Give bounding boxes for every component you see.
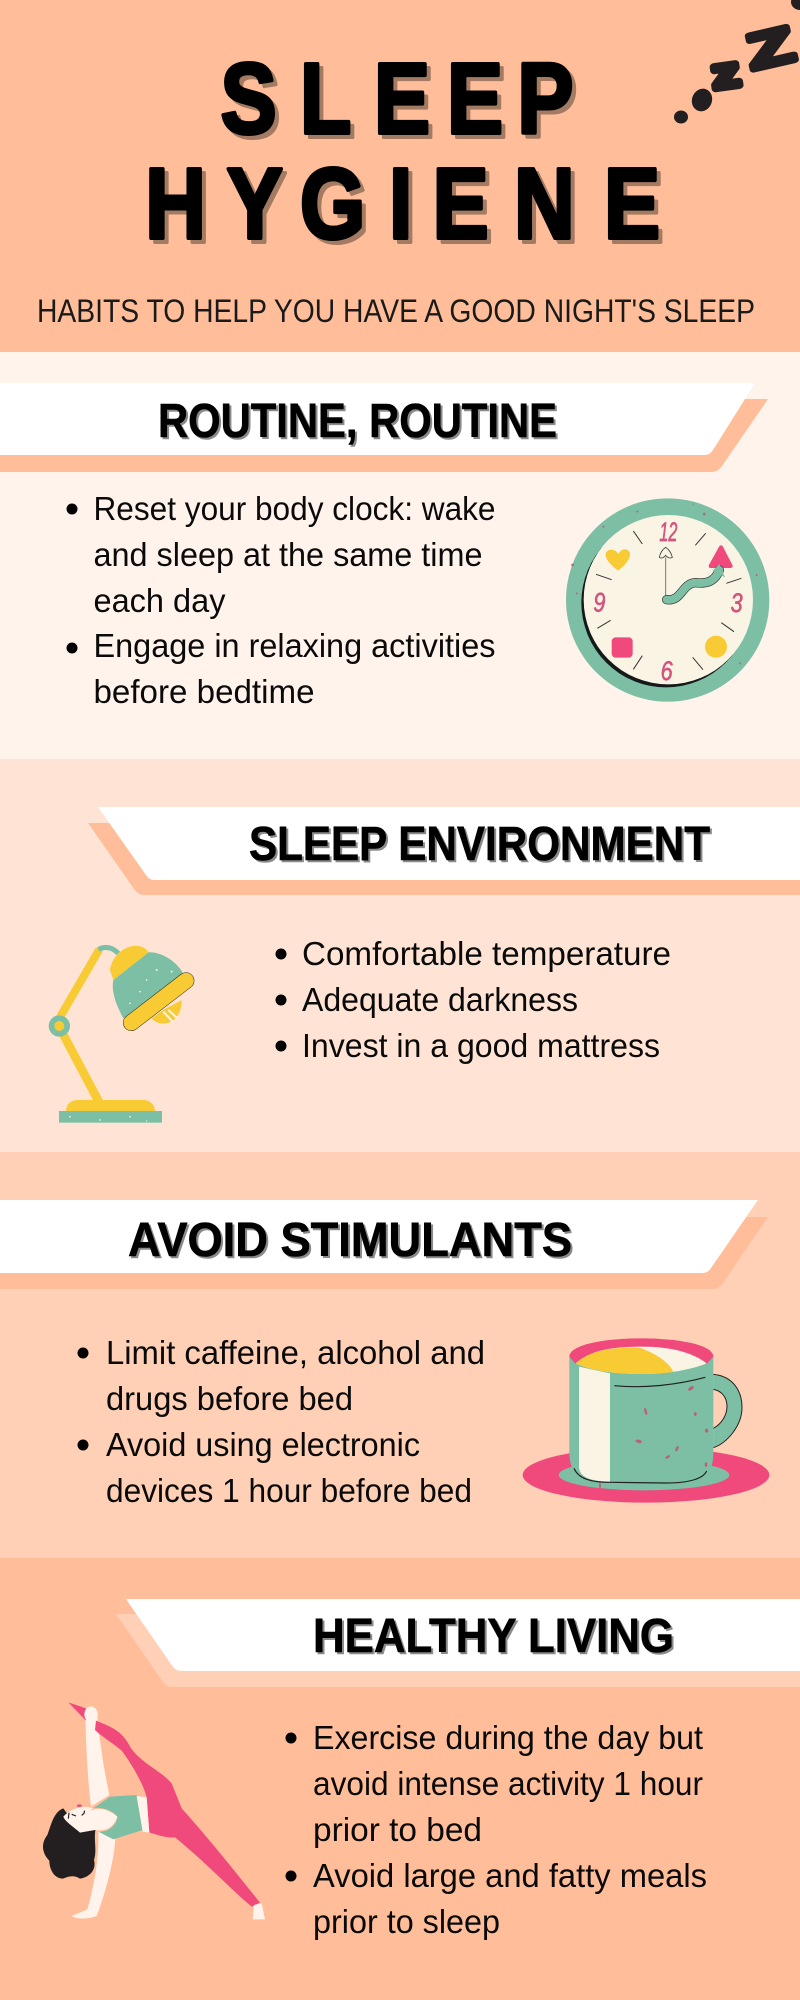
panel: healthy living — [0, 1558, 800, 2000]
text block: stimulants bullets: Avoid using electronic — [106, 1426, 420, 1463]
text block: healthy living bullets: Exercise during the day but — [313, 1719, 703, 1756]
panel: sleep environment — [0, 759, 800, 1152]
title: SLEEP — [221, 42, 573, 155]
text block: stimulants bullets: Limit caffeine, alcohol and — [106, 1334, 485, 1371]
text block: routine bullets: Reset your body clock: wake — [94, 490, 496, 527]
icon: coffee cup — [523, 1338, 769, 1503]
text block: routine bullets — [66, 490, 496, 710]
panel: header background — [0, 0, 800, 352]
heading: routine: ROUTINE, ROUTINE — [158, 395, 557, 448]
heading: healthy living: HEALTHY LIVING — [313, 1610, 674, 1663]
title — [145, 42, 660, 260]
banner: avoid stimulants — [0, 1200, 768, 1289]
icon: woman doing yoga — [43, 1702, 265, 1919]
panel: routine — [0, 352, 800, 759]
icon: clock: 9 — [593, 587, 605, 617]
text block: healthy living bullets: Avoid large and fatty meals — [313, 1857, 707, 1894]
text block: healthy living bullets: prior to bed — [313, 1811, 482, 1848]
text block: environment bullets: Comfortable temperature — [302, 935, 671, 972]
icon: clock: 3 — [731, 588, 743, 618]
text block: healthy living bullets: avoid intense activity 1 hour — [313, 1765, 703, 1802]
heading: avoid stimulants: AVOID STIMULANTS — [128, 1214, 572, 1267]
banner: sleep environment — [88, 807, 800, 895]
icon: sleeping zzz: z — [709, 48, 742, 98]
text block: stimulants bullets: devices 1 hour before bed — [106, 1472, 472, 1509]
text block: environment bullets: Invest in a good mattress — [302, 1027, 660, 1064]
text block: stimulants bullets: drugs before bed — [106, 1380, 353, 1417]
icon: sleeping zzz — [674, 0, 800, 124]
text block: environment bullets: Adequate darkness — [302, 981, 578, 1018]
icon: desk lamp — [49, 946, 186, 1123]
banner: routine — [0, 383, 768, 472]
icon: sleeping zzz: Z — [742, 15, 799, 81]
icon: clock: 12 — [659, 517, 677, 547]
text block: healthy living bullets: prior to sleep — [313, 1903, 500, 1940]
text block: stimulants bullets — [78, 1334, 485, 1509]
text block: healthy living bullets — [286, 1719, 707, 1940]
text block: routine bullets: each day — [94, 582, 226, 619]
text block: routine bullets: and sleep at the same time — [94, 536, 482, 573]
icon: clock: 6 — [661, 656, 673, 686]
text block: routine bullets: Engage in relaxing activities — [94, 627, 496, 664]
banner: healthy living — [116, 1599, 800, 1687]
title: HYGIENE — [145, 147, 660, 260]
text block: routine bullets: before bedtime — [94, 673, 314, 710]
text block: environment bullets — [276, 935, 671, 1064]
icon: clock — [566, 498, 769, 702]
panel: avoid stimulants — [0, 1152, 800, 1558]
heading: sleep environment: SLEEP ENVIRONMENT — [249, 818, 710, 871]
